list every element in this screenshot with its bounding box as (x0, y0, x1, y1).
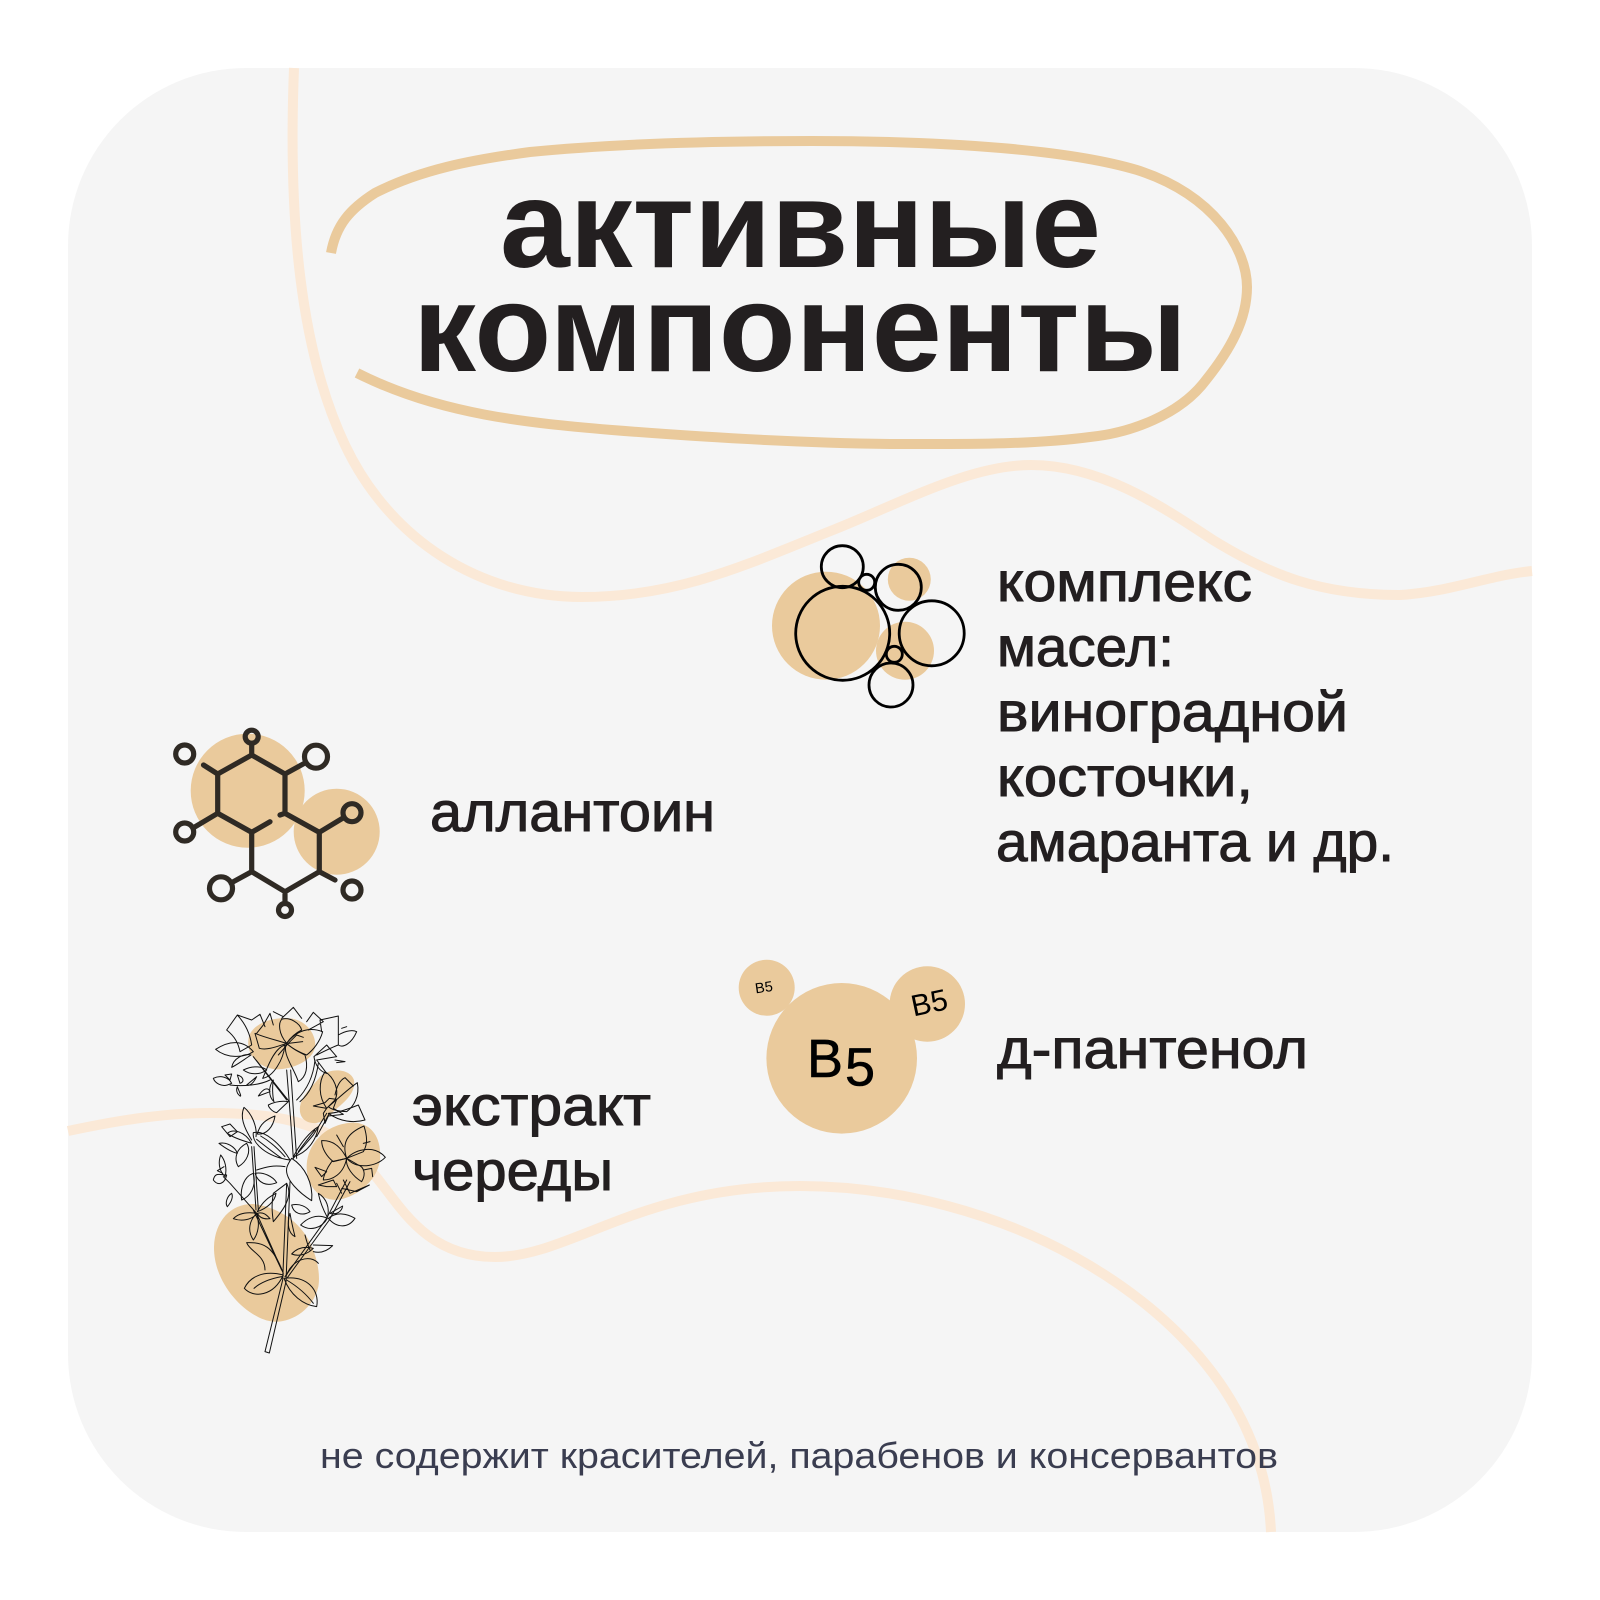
text: oil complex: масел: (997, 615, 1174, 678)
text: oil complex: косточки, (997, 745, 1253, 808)
title (413, 156, 1187, 398)
text: oil complex: комплекс (997, 550, 1252, 613)
text: oil complex (996, 550, 1394, 873)
footer note: не содержит красителей, парабенов и консервантов (320, 1435, 1278, 1476)
bottom leaves (244, 1273, 283, 1294)
icon: B5 circles: B5 (908, 983, 951, 1023)
text: oil complex: амаранта и др. (996, 810, 1394, 873)
decorative wave: bottom (68, 1113, 1271, 1532)
text: oil complex: виноградной (997, 680, 1348, 743)
middle flower (320, 1072, 337, 1108)
right flower (322, 1141, 347, 1162)
stems (265, 1182, 290, 1353)
text: d-panthenol: д-пантенол (997, 1017, 1308, 1080)
title: компоненты (413, 260, 1187, 398)
icon: B5 circles (739, 960, 965, 1134)
top-left sprigs (216, 1014, 265, 1056)
left whorl (233, 1193, 276, 1240)
icon: B5 circles: B (807, 1029, 843, 1089)
text: succession extract: череды (412, 1139, 613, 1202)
icon: B5 circles: 5 (845, 1038, 875, 1098)
central whorl (253, 1132, 290, 1160)
icon: B5 circles: B5 (754, 979, 774, 997)
icon: oil bubbles (772, 546, 964, 707)
top flower (280, 1019, 302, 1043)
text: allantoin: аллантоин (430, 780, 715, 843)
title: активные (500, 156, 1101, 294)
right whorl (301, 1193, 355, 1228)
decorative wave: top (293, 68, 1532, 597)
icon: succession flower (213, 1007, 385, 1353)
text: succession extract: экстракт (412, 1074, 651, 1137)
icon: molecule (176, 730, 380, 916)
title outline (331, 141, 1247, 444)
left flowers and sprigs (242, 1107, 275, 1140)
text: succession extract (412, 1074, 651, 1202)
